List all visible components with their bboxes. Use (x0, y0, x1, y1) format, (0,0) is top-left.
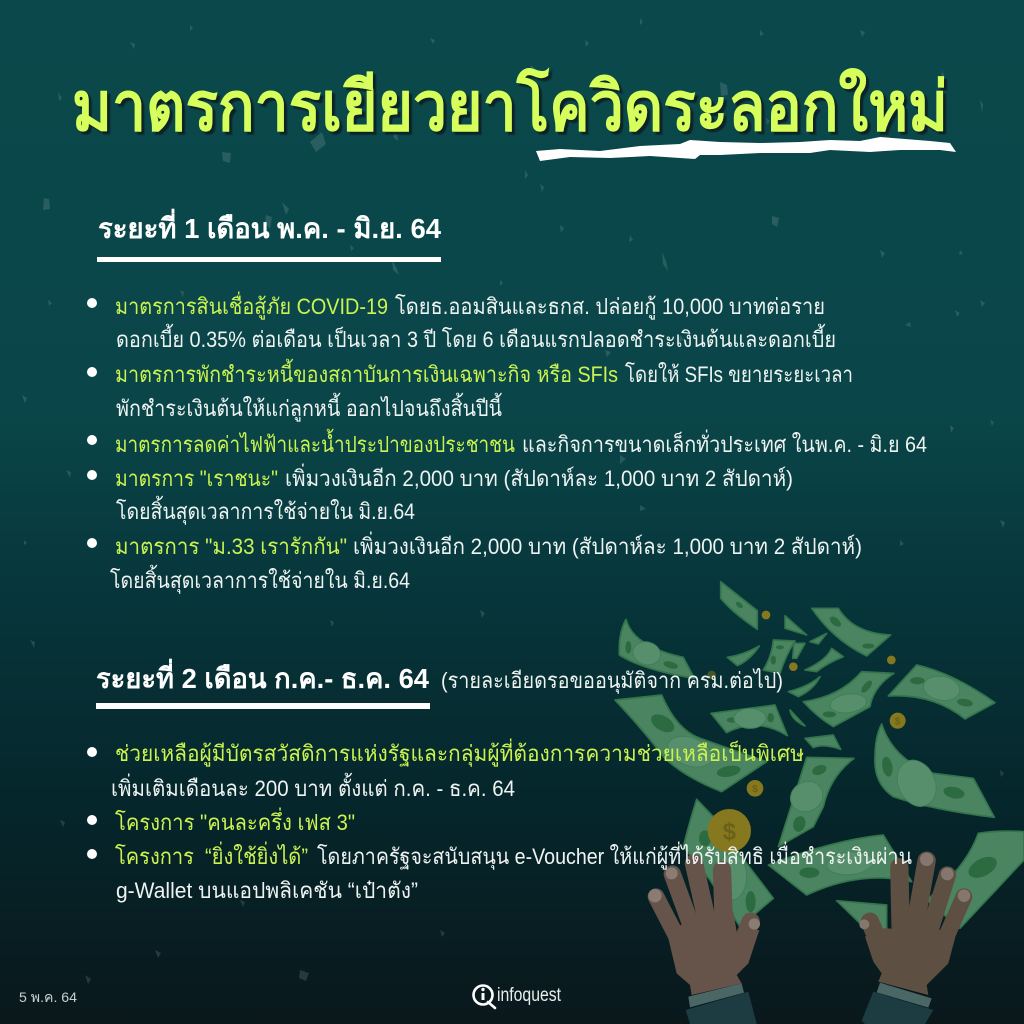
section 1 bullet list: มาตรการลดค่าไฟฟ้าและน้ำประปาของประชาชน (115, 429, 515, 457)
section 1 bullet list: มาตรการพักชำระหนี้ของสถาบันการเงินเฉพาะกิจ หรือ SFIs (115, 359, 618, 387)
section 2 heading: ระยะที่ 2 เดือน ก.ค.- ธ.ค. 64 (96, 658, 429, 694)
banknotes (615, 582, 1024, 930)
section 1 bullet list (87, 291, 927, 594)
section 1 bullet list: โดยให้ SFIs ขยายระยะเวลา (625, 362, 853, 387)
section 1 bullet list: โดยธ.ออมสินและธกส. ปล่อยกู้ 10,000 บาทต่อราย (395, 294, 825, 320)
coins (707, 611, 906, 852)
section 1 bullet list: โดยสิ้นสุดเวลาการใช้จ่ายใน มิ.ย.64 (116, 496, 415, 525)
logo: infoquest: infoquest (497, 985, 562, 1006)
coins: $ (723, 818, 736, 845)
date: 5 พ.ค. 64 (19, 989, 77, 1005)
left hand (648, 863, 760, 1024)
section 2 bullet list: โดยภาครัฐจะสนับสนุน e-Voucher ให้แก่ผู้ที่ได้รับสิทธิ เมื่อชำระเงินผ่าน (317, 841, 912, 870)
brush underline (536, 137, 956, 161)
section 1 bullet list: มาตรการสินเชื่อสู้ภัย COVID-19 (115, 291, 388, 320)
section 2 bullet list (87, 738, 912, 903)
section 1 bullet list: เพิ่มวงเงินอีก 2,000 บาท (สัปดาห์ละ 1,000 บาท 2 สัปดาห์) (353, 531, 862, 559)
logo: infoquest (474, 985, 562, 1008)
hands (648, 853, 970, 1024)
section 2 bullet list: โครงการ "คนละครึ่ง เฟส 3" (115, 807, 355, 835)
section 2 bullet list: เพิ่มเติมเดือนละ 200 บาท ตั้งแต่ ก.ค. - ธ.ค. 64 (111, 773, 515, 801)
section 1 bullet list: มาตรการ "เราชนะ" (115, 466, 278, 491)
section 1 bullet list: มาตรการ "ม.33 เรารักกัน" (115, 534, 347, 559)
banknote centre medallions (630, 639, 962, 900)
section 1 heading: ระยะที่ 1 เดือน พ.ค. - มิ.ย. 64 (98, 208, 441, 244)
section 1 bullet list: โดยสิ้นสุดเวลาการใช้จ่ายใน มิ.ย.64 (110, 565, 410, 594)
section 2 heading: (รายละเอียดรอขออนุมัติจาก ครม.ต่อไป) (441, 668, 783, 694)
section 1 heading (97, 208, 441, 262)
section 2 bullet list: ช่วยเหลือผู้มีบัตรสวัสดิการแห่งรัฐและกลุ่มผู้ที่ต้องการความช่วยเหลือเป็นพิเศษ (115, 738, 804, 767)
banknote ovals (625, 601, 1000, 912)
section 2 bullet list: g-Wallet บนแอปพลิเคชัน “เป๋าตัง” (116, 878, 418, 903)
section 2 heading (96, 658, 783, 709)
coins: $ (895, 716, 901, 727)
section 1 bullet list: และกิจการขนาดเล็กทั่วประเทศ ในพ.ค. - มิ.ย 64 (522, 429, 927, 457)
section 1 bullet list: เพิ่มวงเงินอีก 2,000 บาท (สัปดาห์ละ 1,000 บาท 2 สัปดาห์) (285, 463, 793, 491)
illustration: money falling (615, 582, 1024, 930)
section 1 bullet list: พักชำระเงินต้นให้แก่ลูกหนี้ ออกไปจนถึงสิ้นปีนี้ (116, 393, 502, 422)
section 2 bullet list: โครงการ “ยิ่งใช้ยิ่งได้” (115, 841, 308, 869)
section 1 bullet list: ดอกเบี้ย 0.35% ต่อเดือน เป็นเวลา 3 ปี โดย 6 เดือนแรกปลอดชำระเงินต้นและดอกเบี้ย (116, 324, 836, 352)
right hand (859, 853, 970, 1024)
coins: $ (752, 784, 758, 795)
